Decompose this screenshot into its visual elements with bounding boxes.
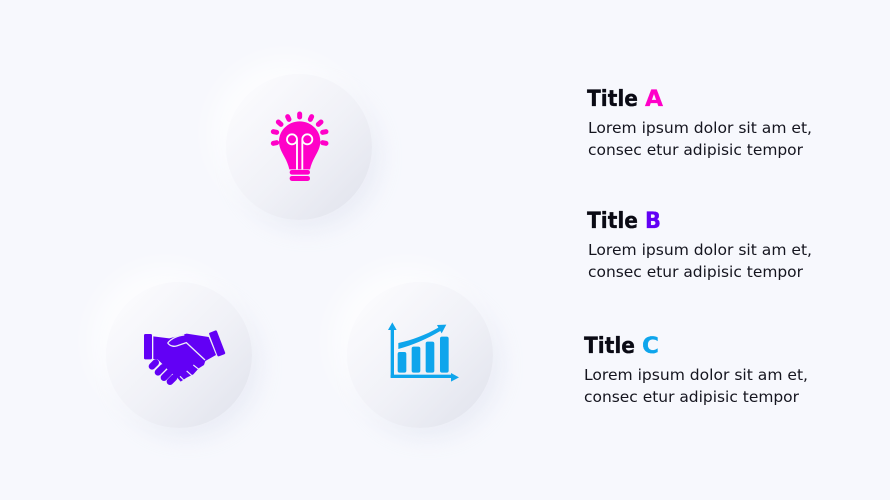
body text B: consec etur adipisic tempor: [588, 263, 804, 281]
heading: Title A: Title: [587, 87, 638, 112]
icon: rising bar chart: [388, 322, 459, 382]
heading: Title C: Title: [584, 334, 635, 359]
heading: Title A: A: [645, 87, 663, 112]
text block: Title C: [584, 334, 808, 406]
icon: light bulb: [273, 114, 326, 181]
text block: Title B: [587, 209, 812, 281]
body text A: consec etur adipisic tempor: [588, 141, 804, 159]
body text B: Lorem ipsum dolor sit am et,: [588, 241, 812, 259]
circle A: [226, 74, 372, 220]
body text A: Lorem ipsum dolor sit am et,: [588, 119, 812, 137]
body text C: consec etur adipisic tempor: [584, 388, 800, 406]
heading: Title B: B: [645, 209, 661, 234]
text block: Title A: [587, 87, 812, 159]
circle B: [106, 282, 252, 428]
icon: handshake: [144, 330, 226, 382]
heading: Title C: C: [642, 334, 659, 359]
body text C: Lorem ipsum dolor sit am et,: [584, 366, 808, 384]
circle C: [347, 282, 493, 428]
heading: Title B: Title: [587, 209, 638, 234]
